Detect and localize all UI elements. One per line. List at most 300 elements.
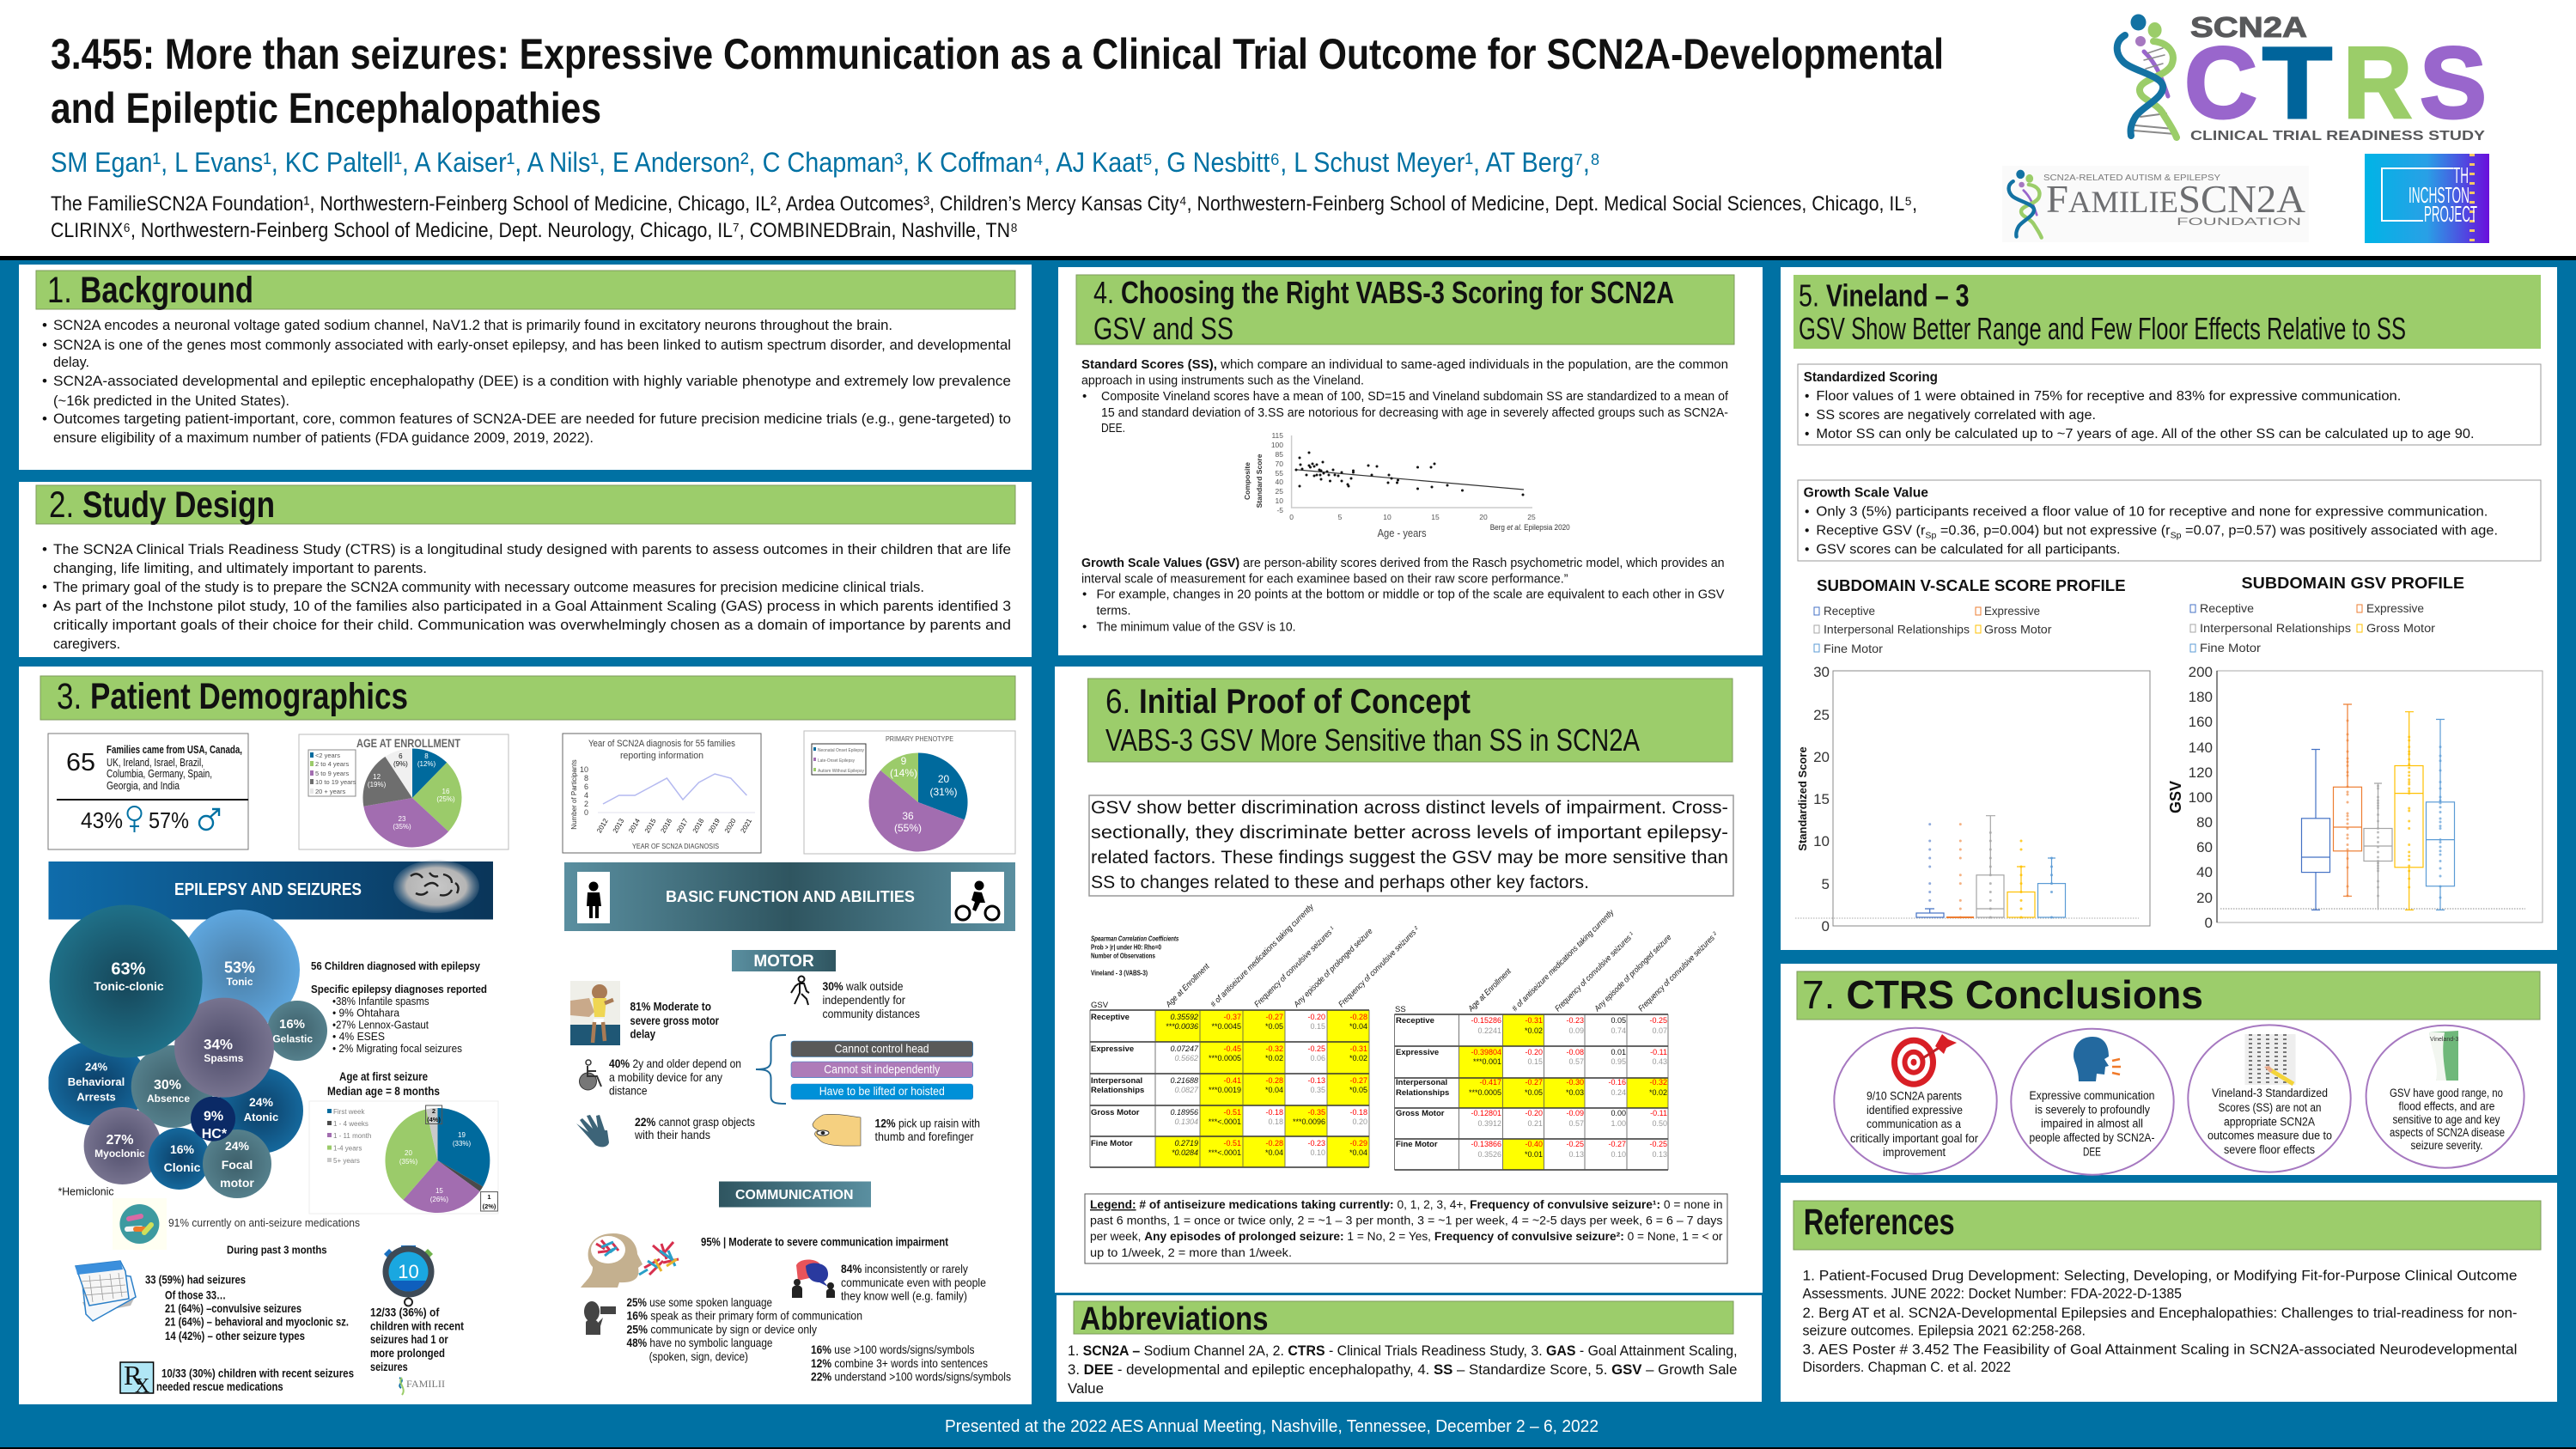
table: GSV correlations: 0.1304: [1174, 1117, 1198, 1126]
heading: communication: [719, 1182, 871, 1208]
chart: year of diagnosis line: 6: [584, 782, 588, 791]
header band: [0, 0, 2576, 260]
conclusion: standardized scores: appropriate SCN2A: [2224, 1116, 2315, 1129]
table: GSV correlations: 0.20: [1352, 1117, 1367, 1126]
text: inconsistently communicate: communicate even with people: [841, 1275, 986, 1289]
chart: subdomain v-scale score profile: 10: [1813, 833, 1830, 849]
table: GSV correlations: *0.04: [1349, 1022, 1367, 1031]
table: SS correlations: -0.25: [1649, 1016, 1667, 1025]
table: SS correlations: 0.13: [1568, 1150, 1584, 1159]
table: GSV correlations: ***<.0001: [1209, 1148, 1241, 1157]
chart: primary phenotype pie: Late-Onset Epilepsy: [818, 758, 855, 764]
table: SS correlations: Frequency of convulsive seizures ¹: [1553, 930, 1636, 1014]
chart: year of diagnosis line: 2012: [595, 817, 610, 834]
table: GSV correlations: Receptive: [1091, 1013, 1130, 1022]
box: growth scale value: Growth Scale Value: [1804, 486, 1928, 501]
bubble chart: seizure types: 53%: [224, 959, 255, 977]
table: SS correlations: 0.95: [1611, 1057, 1626, 1066]
icon: Rx: X: [135, 1375, 149, 1397]
icon: target: [1891, 1034, 1957, 1087]
chart: age at enrollment pie: (25%): [436, 795, 455, 803]
table: GSV correlations: -0.25: [1307, 1044, 1325, 1053]
table: GSV correlations: 0.10: [1310, 1148, 1325, 1157]
abbreviations text: 3. DEE - developmental and epileptic encephalopathy, 4. SS – Standardize Score, 5. GSV – Growth Sale: [1068, 1362, 1738, 1378]
card: families and sex: 57%: [149, 807, 189, 833]
chart legend: Expressive: [1984, 604, 2040, 618]
chart: year of diagnosis line: reporting information: [620, 751, 703, 761]
chart legend: Receptive: [2200, 601, 2254, 615]
chart: year of diagnosis line: 2018: [691, 817, 706, 834]
study design bullets: •: [42, 579, 47, 595]
study design bullets: •: [42, 541, 47, 557]
box: growth scale value: [1798, 480, 2541, 561]
chart: subdomain v-scale score profile: 30: [1813, 664, 1830, 680]
icon: brain: [393, 860, 479, 913]
chart: subdomain GSV profile: 200: [2189, 664, 2213, 680]
text: epilepsy diagnoses: • 4% ESES: [332, 1030, 385, 1043]
table: GSV correlations: -0.51: [1223, 1108, 1241, 1117]
text: growth scale values: interval scale of measurement for each examinee based on their raw score performance.”: [1081, 572, 1568, 587]
conclusion: GSV: sensitive to age and key: [2393, 1113, 2500, 1126]
text: epilepsy diagnoses: •38% Infantile spasms: [332, 995, 429, 1008]
bubble chart: seizure types: Tonic-clonic: [94, 979, 164, 993]
chart: composite standard score scatter: 85: [1276, 450, 1283, 459]
conclusion: standardized scores: [2188, 1025, 2351, 1172]
table: GSV correlations: 0.07247: [1170, 1044, 1199, 1053]
chart legend: Expressive: [2366, 601, 2424, 615]
box: growth scale value: Sp: [1925, 532, 1937, 541]
footer text: Presented at the 2022 AES Annual Meeting, Nashville, Tennessee, December 2 – 6, 2022: [945, 1417, 1599, 1436]
heading: initial proof of concept: VABS-3 GSV More Sensitive than SS in SCN2A: [1105, 722, 1640, 758]
chart: composite standard score scatter: 0: [1289, 513, 1294, 521]
affiliations: [51, 192, 1917, 242]
callout: GSV discrimination: SS to changes related to these and perhaps other key factors.: [1091, 873, 1589, 892]
study design bullets: As part of the Inchstone pilot study, 10 of the families also participated in a Goal Attainment Scaling (GAS) process in which parents identified 3: [53, 598, 1011, 614]
table: GSV correlations: *0.04: [1265, 1086, 1283, 1094]
title: and Epileptic Encephalopathies: [51, 84, 601, 132]
box: standardized scoring: [1798, 364, 2541, 445]
background bullets: [42, 317, 1011, 446]
study design bullets: critically important goals of their choice for their child. Communication was overwhelmingly chosen as a domain of importance by parents and: [53, 617, 1011, 633]
chart: age at enrollment pie: [299, 734, 509, 849]
text: words and signs: 22% understand >100 words/signs/symbols: [811, 1370, 1011, 1384]
icon: baby: [570, 981, 620, 1045]
chart: subdomain GSV profile: SUBDOMAIN GSV PROFILE: [2242, 575, 2464, 592]
table: GSV correlations: ***0.0005: [1209, 1054, 1241, 1062]
chart: composite standard score scatter: 10: [1383, 513, 1392, 521]
conclusion: expressive communication: impaired in almost all: [2041, 1117, 2143, 1130]
table: GSV correlations: 0.5662: [1174, 1054, 1198, 1062]
heading: patient demographics: 3. Patient Demographics: [57, 676, 408, 717]
table: SS correlations: Interpersonal: [1396, 1078, 1447, 1087]
table: SS correlations: -0.31: [1525, 1016, 1543, 1025]
table: GSV correlations: *0.0284: [1172, 1148, 1198, 1157]
heading: CTRS conclusions: 7. CTRS Conclusions: [1802, 972, 2203, 1017]
text: prolonged seizures: [370, 1306, 464, 1373]
background bullets: •: [42, 411, 47, 427]
text: epilepsy diagnoses: •27% Lennox-Gastaut: [332, 1019, 429, 1031]
table: SS correlations: *0.01: [1525, 1150, 1543, 1159]
conclusion: expressive communication: [2011, 1029, 2174, 1175]
banner: basic function and abilities: [564, 862, 1015, 931]
box: standardized scoring: SS scores are negatively correlated with age.: [1816, 408, 2096, 423]
callout: GSV discrimination: related factors. These findings suggest the GSV may be more sensitive than: [1091, 848, 1728, 868]
chart: subdomain GSV profile: 60: [2196, 839, 2213, 855]
background bullets: (~16k predicted in the United States).: [53, 393, 289, 409]
chart: subdomain GSV profile: 180: [2189, 689, 2213, 705]
bubble chart: seizure types: 24%: [249, 1095, 274, 1109]
chart: age at first seizure pie: 15: [435, 1187, 443, 1195]
bubble chart: seizure types: Clonic: [164, 1160, 201, 1174]
conclusion: GSV: seizure severity.: [2410, 1139, 2482, 1152]
text: inconsistently communicate: they know well (e.g. family): [841, 1289, 967, 1303]
chart: age at enrollment pie: (9%): [393, 760, 408, 768]
bubble chart: seizure types: Tonic: [226, 976, 253, 988]
box: growth scale value: •: [1805, 524, 1809, 539]
bubble chart: seizure types: Spasms: [204, 1052, 244, 1064]
text: seizures in past 3 months: [145, 1274, 349, 1342]
icon: calendar: [76, 1261, 136, 1321]
chart: subdomain GSV profile: 0: [2205, 915, 2213, 931]
text: gross motor delay: [630, 1000, 719, 1041]
table: SS correlations: *0.03: [1566, 1088, 1584, 1097]
text: prolonged seizures: children with recent: [370, 1319, 464, 1332]
chart legend: Interpersonal Relationships: [2200, 621, 2351, 635]
text: growth scale values: [1081, 556, 1725, 635]
chart: primary phenotype pie: PRIMARY PHENOTYPE: [886, 735, 953, 743]
table: SS correlations: -0.20: [1525, 1109, 1543, 1117]
text: pick up raisin: 12% pick up raisin with: [874, 1117, 980, 1130]
box: growth scale value: GSV scores can be calculated for all participants.: [1816, 543, 2121, 557]
chart: subdomain GSV profile: 160: [2189, 714, 2213, 730]
icon: Rx: R: [124, 1360, 143, 1391]
icon: Vineland manual: [2429, 1031, 2458, 1081]
chart: year of diagnosis line: 10: [580, 765, 588, 774]
conclusion: expressive communication: Expressive communication: [2029, 1089, 2154, 1102]
table: GSV correlations: -0.13: [1307, 1076, 1325, 1085]
chart legend: Fine Motor: [1824, 642, 1883, 655]
table: GSV correlations: -0.41: [1223, 1076, 1241, 1085]
heading: choosing scoring: [1093, 275, 1674, 346]
heading: motor: [732, 950, 836, 971]
conclusion: GSV: aspects of SCN2A disease: [2390, 1126, 2505, 1139]
chart: subdomain GSV profile: 120: [2189, 764, 2213, 781]
table: SS correlations: -0.08: [1566, 1048, 1584, 1056]
chart: age at first seizure pie: (35%): [399, 1158, 418, 1166]
text: spoken language: (spoken, sign, device): [649, 1349, 748, 1363]
table: SS correlations: [1395, 907, 1720, 1170]
text: prolonged seizures: seizures: [370, 1361, 408, 1373]
chart: primary phenotype pie: (14%): [890, 767, 917, 779]
conclusion: goal: improvement: [1883, 1146, 1946, 1159]
chart: age at enrollment pie: (19%): [368, 781, 387, 788]
references list: Disorders. Chapman C. et al. 2022: [1802, 1359, 2011, 1375]
box: growth scale value: =0.36, p=0.004) but not expressive (r: [1936, 524, 2171, 539]
chart: composite standard score scatter: 15: [1431, 513, 1440, 521]
table: GSV correlations: 0.15: [1310, 1022, 1325, 1031]
legend box: past 6 months, 1 = once or twice only, 2 = ~1 – 3 per month, 3 = ~1 per week, 4 = ~2-5 days per week, 6 = 6 – 7 days: [1090, 1214, 1723, 1227]
box: growth scale value: •: [1805, 543, 1809, 557]
table: SS correlations: -0.39804: [1471, 1048, 1501, 1056]
table: GSV correlations: -0.27: [1349, 1076, 1367, 1085]
card: families and sex: 65: [66, 749, 95, 776]
pill: cannot control head: [791, 1041, 973, 1056]
heading: choosing scoring: GSV and SS: [1093, 311, 1233, 346]
logo: small FamilieSCN2A: FAMILII: [406, 1378, 445, 1390]
icon: cyclist: [951, 872, 1004, 923]
chart: age at enrollment pie: (35%): [393, 823, 411, 831]
table: SS correlations: -0.32: [1649, 1078, 1667, 1087]
chart: age at enrollment pie: (12%): [417, 760, 436, 768]
table: GSV correlations: *0.02: [1265, 1054, 1283, 1062]
chart: age at first seizure pie: [309, 1101, 498, 1214]
chart: age at first seizure pie: 2: [432, 1107, 435, 1115]
table: SS correlations: # of antiseizure medications taking currently: [1510, 907, 1617, 1014]
chart: age at first seizure pie: 19: [458, 1131, 466, 1139]
table: SS correlations: Gross Motor: [1396, 1109, 1445, 1118]
chart: year of diagnosis line: Year of SCN2A diagnosis for 55 families: [588, 739, 735, 749]
chart: age at enrollment pie: 5 to 9 years: [315, 770, 349, 777]
icon: Vineland manual: Vineland-3: [2430, 1037, 2458, 1043]
table note: Number of Observations: [1091, 953, 1155, 960]
box: standardized scoring: •: [1805, 427, 1809, 441]
table: GSV correlations: *0.04: [1265, 1148, 1283, 1157]
text: epilepsy diagnoses: Specific epilepsy diagnoses reported: [311, 983, 487, 995]
bubble chart: seizure types: 63%: [111, 960, 146, 979]
table: GSV correlations: *0.02: [1349, 1054, 1367, 1062]
text: standard scores: approach in using instruments such as the Vineland.: [1081, 374, 1364, 388]
chart: subdomain v-scale score profile: Standardized Score: [1796, 746, 1809, 851]
conclusion: standardized scores: severe floor effects: [2224, 1143, 2315, 1156]
logo: FamilieSCN2A Foundation: FOUNDATION: [2177, 216, 2301, 228]
note: hemiclonic: *Hemiclonic: [58, 1185, 113, 1197]
references list: seizure outcomes. Epilepsia 2021 62:258-268.: [1802, 1323, 2086, 1339]
text: standard scores: [1081, 357, 1729, 435]
title: [51, 30, 1944, 132]
chart: year of diagnosis line: 2019: [707, 817, 722, 834]
text: gross motor delay: 81% Moderate to: [630, 1000, 711, 1014]
chart: composite standard score scatter: 25: [1527, 513, 1536, 521]
icon: walking person: [791, 976, 809, 1005]
icon: stopwatch: [383, 1245, 435, 1306]
table: SS correlations: -0.13866: [1471, 1140, 1501, 1148]
table: GSV correlations: -0.31: [1349, 1044, 1367, 1053]
text: seizures in past 3 months: 21 (64%) – behavioral and myoclonic sz.: [165, 1316, 349, 1329]
chart: subdomain GSV profile: 80: [2196, 814, 2213, 831]
conclusion: goal: 9/10 SCN2A parents: [1867, 1090, 1962, 1103]
background bullets: SCN2A encodes a neuronal voltage gated sodium channel, NaV1.2 that is primarily found in excitatory neurons throughout the brain.: [53, 317, 892, 333]
text: age at first seizure: Median age = 8 months: [327, 1085, 440, 1098]
legend box: [1085, 1194, 1727, 1263]
box: growth scale value: •: [1805, 505, 1809, 520]
table: GSV correlations: Interpersonal: [1091, 1076, 1142, 1086]
chart legend: Gross Motor: [1984, 623, 2052, 636]
text: walk outside: community distances: [823, 1007, 920, 1020]
text: prolonged seizures: 12/33 (36%) of: [370, 1306, 440, 1319]
box: growth scale value: =0.07, p=0.57) was positively associated with age.: [2182, 524, 2498, 539]
references list: Assessments. JUNE 2022: Docket Number: FDA-2022-D-1385: [1802, 1286, 2182, 1302]
table: SS correlations: -0.12801: [1471, 1109, 1501, 1117]
conclusion: expressive communication: DEE: [2083, 1146, 2101, 1159]
table: SS correlations: Age at Enrollment: [1466, 966, 1513, 1014]
conclusion: standardized scores: Vineland-3 Standardized: [2212, 1087, 2328, 1099]
bubble chart: seizure types: 34%: [204, 1037, 233, 1053]
chart: composite standard score scatter: 100: [1271, 441, 1283, 449]
table: GSV correlations: Relationships: [1091, 1086, 1144, 1095]
table: SS correlations: ***0.0005: [1469, 1088, 1501, 1097]
chart: composite standard score scatter: Standard Score: [1255, 454, 1264, 508]
study design bullets: •: [42, 598, 47, 614]
table: SS correlations: 0.09: [1568, 1026, 1584, 1035]
panel: CTRS conclusions: [1781, 964, 2557, 1175]
chart: composite standard score scatter: 5: [1338, 513, 1343, 521]
chart: age at first seizure pie: (26%): [430, 1196, 448, 1203]
conclusion: standardized scores: Scores (SS) are not an: [2218, 1101, 2321, 1114]
conclusion: goal: identified expressive: [1867, 1104, 1963, 1117]
chart: primary phenotype pie: Neonatal Onset Epilepsy: [818, 748, 864, 753]
table: GSV correlations: 0.2719: [1174, 1139, 1198, 1148]
text: gross motor delay: severe gross motor: [630, 1014, 719, 1027]
table: SS correlations: -0.417: [1479, 1078, 1501, 1087]
chart: age at enrollment pie: AGE AT ENROLLMENT: [356, 736, 460, 750]
chart: age at enrollment pie: 10 to 19 years: [315, 778, 356, 786]
chart: primary phenotype pie: 20: [938, 773, 949, 785]
text: growth scale values: For example, changes in 20 points at the bottom or middle or top of the scale are equivalent to each other in GSV: [1096, 588, 1725, 602]
text: mobility device: distance: [609, 1084, 648, 1098]
icon: answer sheet with pencil: [2245, 1034, 2295, 1085]
logo: The Inchstone Project: [2365, 154, 2489, 243]
table: SS correlations: 0.13: [1652, 1150, 1667, 1159]
text: cannot grasp: 22% cannot grasp objects: [635, 1115, 755, 1129]
bubble chart: seizure types: Atonic: [244, 1111, 278, 1123]
chart: age at first seizure pie: (33%): [453, 1140, 472, 1148]
box: standardized scoring: •: [1805, 389, 1809, 404]
card: families and sex: 43%: [81, 807, 123, 833]
abbreviations text: 1. SCN2A – Sodium Channel 2A, 2. CTRS - Clinical Trials Readiness Study, 3. GAS - Goal Attainment Scaling,: [1068, 1343, 1737, 1359]
chart: age at first seizure pie: (2%): [483, 1202, 496, 1210]
chart: age at enrollment pie: 23: [399, 815, 406, 823]
table: GSV correlations: 0.35592: [1170, 1013, 1198, 1021]
logo: FamilieSCN2A Foundation: SCN2A-RELATED AUTISM & EPILEPSY: [2043, 173, 2220, 183]
text: rescue medications: 10/33 (30%) children with recent seizures: [161, 1367, 354, 1379]
table: GSV correlations: *0.05: [1349, 1086, 1367, 1094]
chart: year of diagnosis line: 2020: [723, 817, 738, 834]
text: spoken language: 25% communicate by sign or device only: [627, 1323, 817, 1336]
text: spoken language: [627, 1295, 862, 1363]
table: SS correlations: Relationships: [1396, 1088, 1449, 1098]
chart: age at enrollment pie: 2 to 4 years: [315, 760, 349, 768]
logo: SCN2A CTRS: R: [2343, 27, 2412, 140]
text: prolonged seizures: seizures had 1 or: [370, 1333, 448, 1346]
table: SS correlations: *0.05: [1525, 1088, 1543, 1097]
text: epilepsy diagnoses: [311, 959, 487, 1055]
text: growth scale values: •: [1082, 620, 1087, 635]
chart: age at first seizure pie: 1 - 11 month: [333, 1132, 371, 1140]
table: SS correlations: 0.57: [1568, 1119, 1584, 1128]
table: GSV correlations: Expressive: [1091, 1044, 1134, 1054]
chart: age at enrollment pie: 12: [373, 773, 381, 781]
table note: Spearman Correlation Coefficients: [1091, 935, 1179, 943]
table: GSV correlations: -0.18: [1265, 1108, 1283, 1117]
table: SS correlations: 0.15: [1527, 1057, 1543, 1066]
icon: people talking: [792, 1260, 835, 1298]
table: SS correlations: -0.30: [1566, 1078, 1584, 1087]
background bullets: •: [42, 317, 47, 333]
chart: subdomain v-scale score profile: 5: [1822, 876, 1830, 892]
icon: stopwatch: 10: [398, 1261, 419, 1282]
conclusion: goal: critically important goal for: [1850, 1132, 1978, 1145]
background bullets: •: [42, 373, 47, 389]
references list: 2. Berg AT et al. SCN2A-Developmental Epilepsies and Encephalopathies: Challenges to trial-readiness for non-: [1802, 1305, 2517, 1321]
table: SS correlations: -0.27: [1525, 1078, 1543, 1087]
table: GSV correlations: 0.18956: [1170, 1108, 1198, 1117]
logo: FamilieSCN2A Foundation: [2002, 166, 2309, 242]
chart: subdomain v-scale score profile: SUBDOMAIN V-SCALE SCORE PROFILE: [1817, 577, 2126, 594]
logo: SCN2A CTRS: C: [2184, 27, 2257, 140]
box: growth scale value: Sp: [2171, 532, 2182, 541]
abbreviations text: [1068, 1343, 1738, 1397]
table: GSV correlations: 0.35: [1310, 1086, 1325, 1094]
chart: age at enrollment pie: 8: [424, 752, 429, 760]
bubble chart: seizure types: motor: [220, 1176, 254, 1190]
text: gross motor delay: delay: [630, 1027, 655, 1041]
text: rescue medications: [156, 1367, 354, 1393]
table: GSV correlations: -0.29: [1349, 1139, 1367, 1148]
table: GSV correlations: ***0.0096: [1293, 1117, 1325, 1126]
text: growth scale values: •: [1082, 588, 1087, 602]
abbreviations text: Value: [1068, 1381, 1104, 1397]
conclusion: goal: communication as a: [1867, 1117, 1961, 1130]
text: prolonged seizures: more prolonged: [370, 1347, 445, 1360]
text: epilepsy diagnoses: • 2% Migrating focal seizures: [332, 1042, 462, 1055]
conclusion: GSV: GSV have good range, no: [2390, 1087, 2503, 1099]
heading: vineland: [1799, 278, 2406, 346]
logo: SCN2A CTRS: S: [2420, 27, 2487, 140]
callout: GSV discrimination: sectionally, they discriminate better across levels of important epilepsy-: [1091, 823, 1728, 843]
text: cannot grasp: [634, 1115, 755, 1142]
table: GSV correlations: -0.32: [1265, 1044, 1283, 1053]
heading: references: References: [1804, 1202, 1955, 1243]
text: growth scale values: The minimum value of the GSV is 10.: [1096, 620, 1295, 635]
table: SS correlations: 0.2241: [1477, 1026, 1501, 1035]
chart legend: [1814, 604, 2052, 655]
legend box: per week, Any episodes of prolonged seizure: 1 = No, 2 = Yes, Frequency of convulsive seizure²: 0 = None, 1 = < or: [1090, 1229, 1723, 1243]
chart: subdomain GSV profile: 140: [2189, 740, 2213, 756]
table: GSV correlations: 0.06: [1310, 1054, 1325, 1062]
box: standardized scoring: •: [1805, 408, 1809, 423]
authors: SM Egan¹, L Evans¹, KC Paltell¹, A Kaiser¹, A Nils¹, E Anderson², C Chapman³, K Coffman⁴, AJ Kaat⁵, G Nesbitt⁶, L Schust Meyer¹, AT Berg⁷,⁸: [51, 147, 1600, 178]
chart: composite standard score scatter: 40: [1276, 478, 1283, 486]
table: GSV correlations: ***<.0001: [1209, 1117, 1241, 1126]
logo: SCN2A CTRS: SCN2A: [2190, 11, 2307, 43]
table: SS correlations: 0.43: [1652, 1057, 1667, 1066]
background bullets: •: [42, 337, 47, 353]
conclusion: goal: [1834, 1028, 1997, 1174]
chart legend: Fine Motor: [2200, 641, 2261, 654]
table: SS correlations: -0.15286: [1471, 1016, 1501, 1025]
heading: abbreviations: Abbreviations: [1081, 1301, 1268, 1337]
bubble chart: seizure types: 30%: [154, 1078, 181, 1093]
chart: composite standard score scatter: Berg et al. Epilepsia 2020: [1490, 523, 1570, 532]
bubble chart: seizure types: Arrests: [76, 1091, 116, 1104]
study design bullets: The primary goal of the study is to prepare the SCN2A community with necessary outcome measures for precision medicine clinical trials.: [53, 579, 924, 595]
chart: subdomain GSV profile: 100: [2189, 789, 2213, 806]
box: growth scale value: Only 3 (5%) participants received a floor value of 10 for receptive and none for expressive communication.: [1816, 505, 2488, 520]
icon: speaking figure: [584, 1301, 616, 1335]
text: spoken language: 48% have no symbolic language: [627, 1336, 773, 1349]
table: GSV correlations: -0.18: [1349, 1108, 1367, 1117]
study design bullets: caregivers.: [53, 636, 120, 652]
